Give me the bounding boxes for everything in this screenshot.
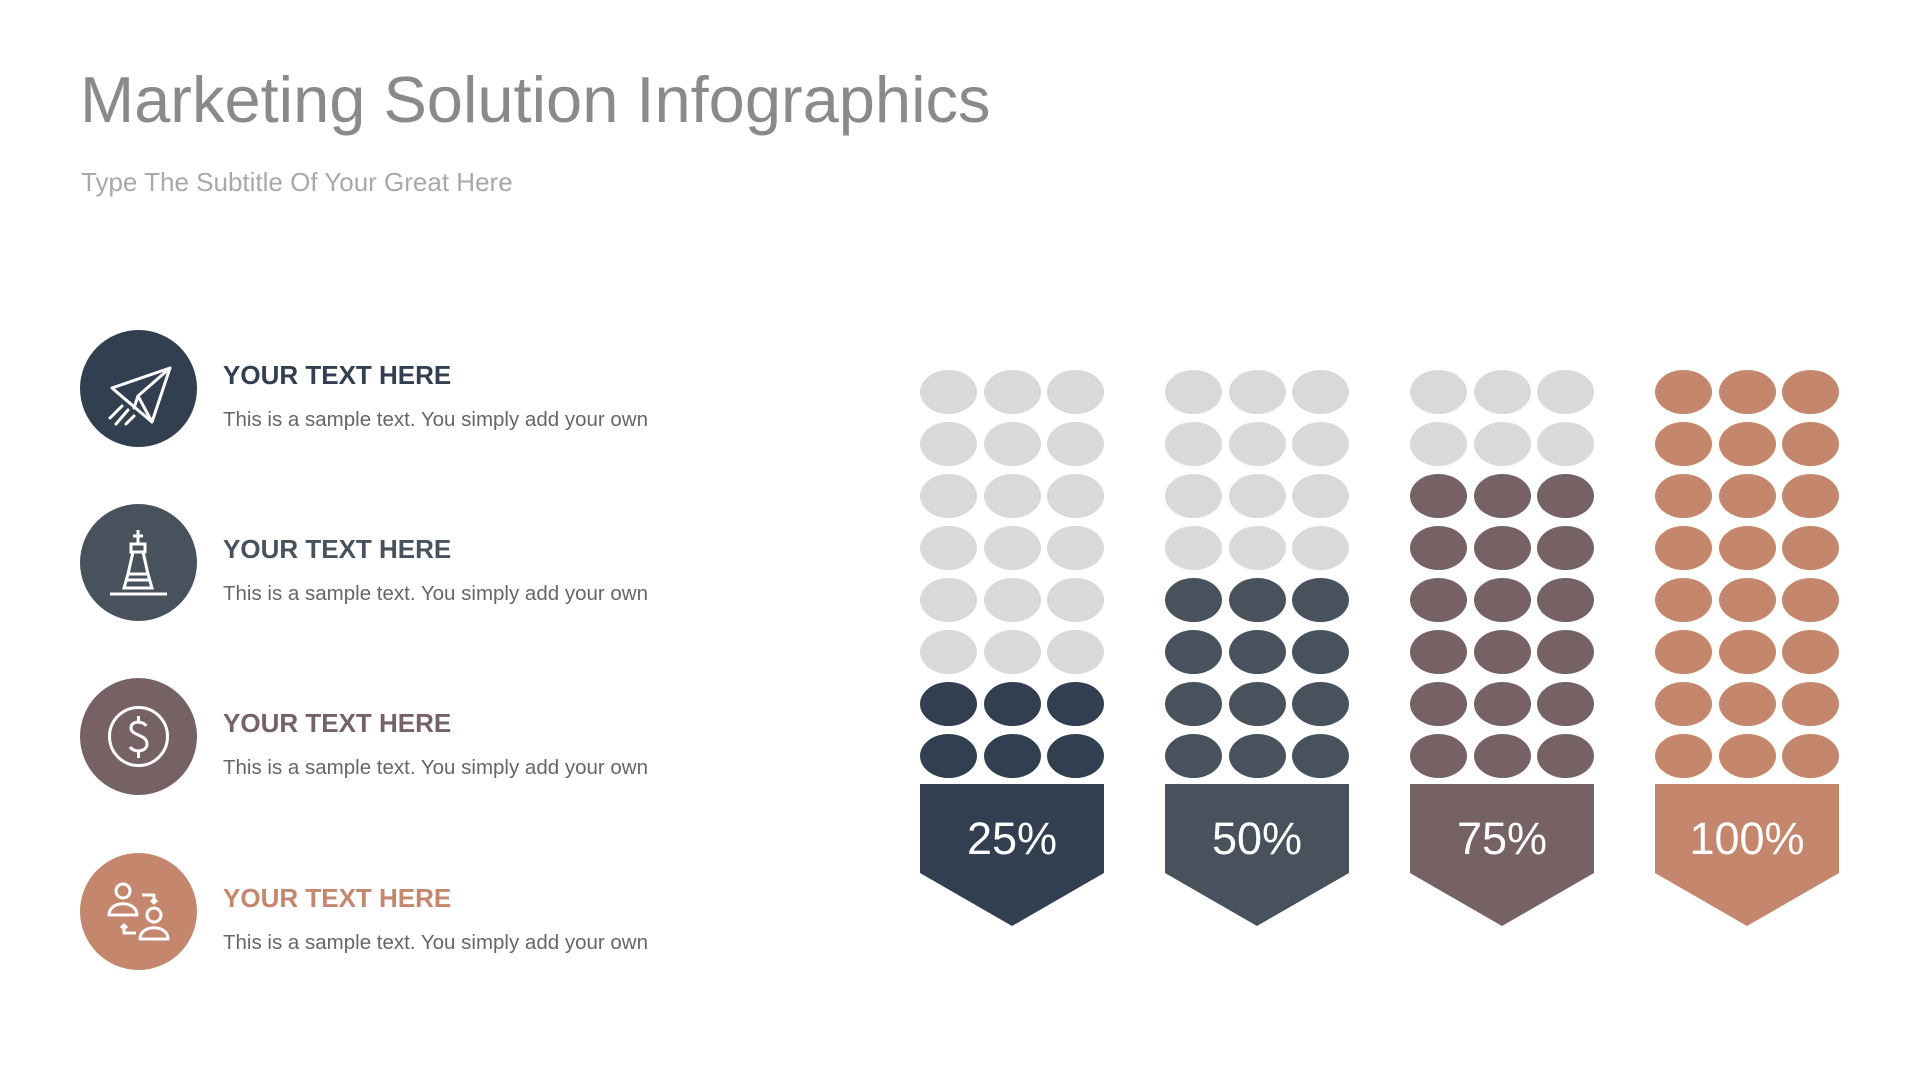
icon: chess king <box>80 504 197 621</box>
text 4: This is a sample text. You simply add your own <box>223 931 648 954</box>
item 2 <box>80 504 648 621</box>
heading 3: YOUR TEXT HERE <box>223 708 451 738</box>
label 50%: 50% <box>1212 813 1302 864</box>
banner 100% <box>1655 784 1839 926</box>
text 3: This is a sample text. You simply add your own <box>223 756 648 779</box>
item 3 <box>80 678 648 795</box>
heading 2: YOUR TEXT HERE <box>223 534 451 564</box>
label 25%: 25% <box>967 813 1057 864</box>
icon: dollar coin <box>80 678 197 795</box>
text 1: This is a sample text. You simply add your own <box>223 408 648 431</box>
icon: paper plane <box>80 330 197 447</box>
banner 25% <box>920 784 1104 926</box>
text 2: This is a sample text. You simply add your own <box>223 582 648 605</box>
column 25% <box>920 370 1104 926</box>
label 75%: 75% <box>1457 813 1547 864</box>
icon: people exchange <box>80 853 197 970</box>
item 4 <box>80 853 648 970</box>
item 1 <box>80 330 648 447</box>
subtitle: Type The Subtitle Of Your Great Here <box>81 167 513 197</box>
column 75% <box>1410 370 1594 926</box>
label 100%: 100% <box>1689 813 1805 864</box>
column 100% <box>1655 370 1839 926</box>
column 50% <box>1165 370 1349 926</box>
banner 75% <box>1410 784 1594 926</box>
heading 1: YOUR TEXT HERE <box>223 360 451 390</box>
heading 4: YOUR TEXT HERE <box>223 883 451 913</box>
banner 50% <box>1165 784 1349 926</box>
title: Marketing Solution Infographics <box>80 63 991 136</box>
